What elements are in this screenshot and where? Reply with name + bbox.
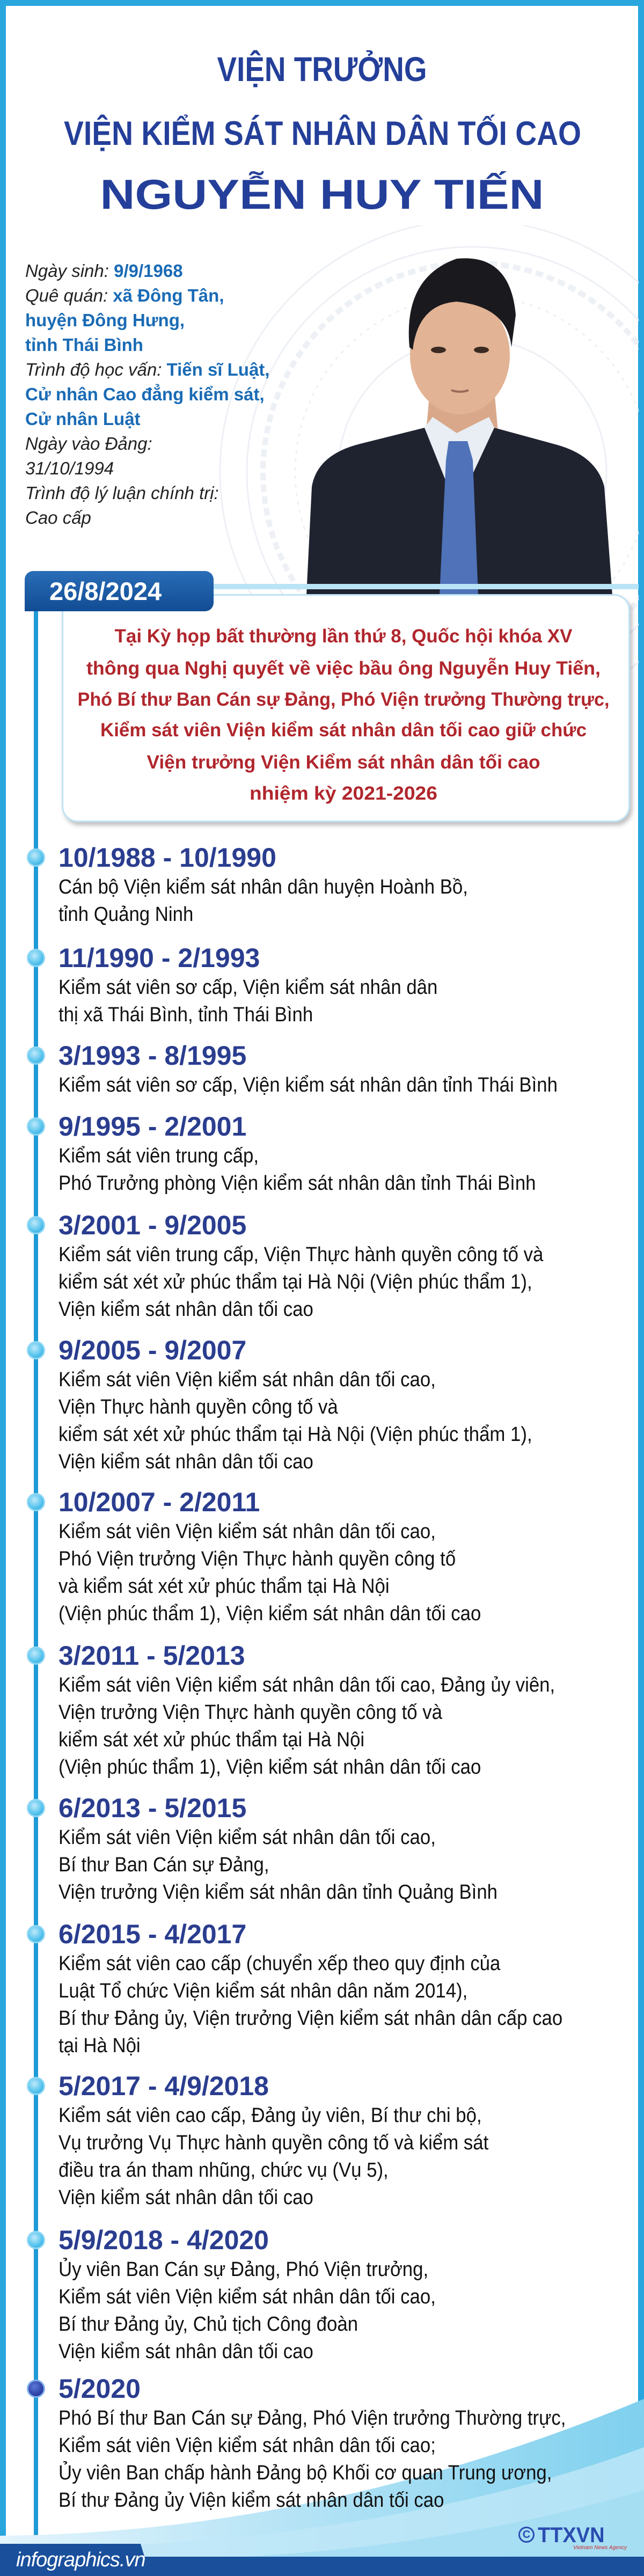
title: NGUYỄN HUY TIẾN	[100, 171, 544, 218]
timeline: 9/1995 - 2/2001	[27, 1111, 536, 1195]
timeline: 3/2011 - 5/2013	[27, 1641, 555, 1779]
callout: election resolution: Kiểm sát viên Viện kiểm sát nhân dân tối cao giữ chức	[100, 720, 587, 741]
timeline: 10/2007 - 2/2011	[27, 1487, 481, 1625]
timeline: 5/9/2018 - 4/2020: 5/9/2018 - 4/2020	[58, 2225, 269, 2255]
timeline: 5/2020: Bí thư Đảng ủy Viện kiểm sát nhân dân tối cao	[58, 2489, 444, 2512]
timeline: 9/2005 - 9/2007: Viện Thực hành quyền công tố và	[58, 1396, 338, 1418]
timeline: 5/2017 - 4/9/2018	[27, 2071, 488, 2209]
timeline: 9/2005 - 9/2007	[27, 1335, 532, 1473]
timeline: 5/9/2018 - 4/2020: Kiểm sát viên Viện kiểm sát nhân dân tối cao,	[58, 2286, 436, 2308]
timeline: 3/2011 - 5/2013: Kiểm sát viên Viện kiểm sát nhân dân tối cao, Đảng ủy viên,	[58, 1674, 555, 1696]
timeline: 11/1990 - 2/1993: 11/1990 - 2/1993	[58, 943, 260, 973]
footer: infographics.vn: infographics.vn	[16, 2549, 145, 2571]
callout: election resolution: nhiệm kỳ 2021-2026	[250, 783, 437, 804]
personal info: Cao cấp	[25, 508, 91, 528]
timeline: 6/2013 - 5/2015: 6/2013 - 5/2015	[58, 1793, 246, 1823]
timeline: 10/2007 - 2/2011: 10/2007 - 2/2011	[58, 1487, 260, 1517]
timeline: 6/2015 - 4/2017: Kiểm sát viên cao cấp (chuyển xếp theo quy định của	[58, 1952, 500, 1975]
timeline: 3/2011 - 5/2013: (Viện phúc thẩm 1), Viện kiểm sát nhân dân tối cao	[58, 1756, 481, 1779]
personal info: tỉnh Thái Bình	[25, 335, 143, 355]
personal info: Quê quán: xã Đông Tân,	[25, 286, 224, 305]
callout: election resolution	[62, 594, 630, 822]
timeline: 5/2017 - 4/9/2018: Vụ trưởng Vụ Thực hành quyền công tố và kiểm sát	[58, 2132, 488, 2154]
logo: TTXVN	[518, 2523, 627, 2551]
timeline: 3/1993 - 8/1995: 3/1993 - 8/1995	[58, 1041, 246, 1071]
timeline: 10/2007 - 2/2011: và kiểm sát xét xử phúc thẩm tại Hà Nội	[58, 1575, 390, 1598]
timeline: 9/2005 - 9/2007: kiểm sát xét xử phúc thẩm tại Hà Nội (Viện phúc thẩm 1),	[58, 1423, 532, 1446]
timeline: 5/2017 - 4/9/2018: 5/2017 - 4/9/2018	[58, 2071, 269, 2101]
timeline: 5/9/2018 - 4/2020	[27, 2225, 436, 2363]
callout: election resolution: Phó Bí thư Ban Cán sự Đảng, Phó Viện trưởng Thường trực,	[77, 689, 610, 710]
date badge: 26/8/2024	[49, 577, 162, 605]
timeline: 3/2001 - 9/2005: kiểm sát xét xử phúc thẩm tại Hà Nội (Viện phúc thẩm 1),	[58, 1271, 532, 1293]
timeline: 6/2015 - 4/2017: Luật Tổ chức Viện kiểm sát nhân dân năm 2014),	[58, 1980, 467, 2002]
footer bar	[0, 2557, 644, 2576]
timeline: 10/2007 - 2/2011: Phó Viện trưởng Viện Thực hành quyền công tố	[58, 1548, 456, 1570]
personal info: Ngày sinh: 9/9/1968	[25, 261, 183, 281]
callout: election resolution: Viện trưởng Viện Kiểm sát nhân dân tối cao	[147, 752, 540, 773]
timeline: 9/2005 - 9/2007: 9/2005 - 9/2007	[58, 1335, 246, 1365]
timeline: 3/1993 - 8/1995	[27, 1041, 558, 1096]
timeline: 9/2005 - 9/2007: Kiểm sát viên Viện kiểm sát nhân dân tối cao,	[58, 1368, 436, 1391]
timeline: 5/9/2018 - 4/2020: Viện kiểm sát nhân dân tối cao	[58, 2340, 313, 2363]
timeline: 6/2013 - 5/2015: Kiểm sát viên Viện kiểm sát nhân dân tối cao,	[58, 1826, 436, 1849]
timeline: 5/2020: Phó Bí thư Ban Cán sự Đảng, Phó Viện trưởng Thường trực,	[58, 2407, 566, 2429]
timeline: 11/1990 - 2/1993: Kiểm sát viên sơ cấp, Viện kiểm sát nhân dân	[58, 976, 437, 999]
timeline: 3/2001 - 9/2005: Viện kiểm sát nhân dân tối cao	[58, 1298, 313, 1321]
timeline: 5/2017 - 4/9/2018: Kiểm sát viên cao cấp, Đảng ủy viên, Bí thư chi bộ,	[58, 2104, 482, 2127]
title: VIỆN KIỂM SÁT NHÂN DÂN TỐI CAO	[64, 114, 581, 152]
timeline: 6/2013 - 5/2015: Bí thư Ban Cán sự Đảng,	[58, 1854, 269, 1876]
timeline: 6/2015 - 4/2017: 6/2015 - 4/2017	[58, 1919, 246, 1949]
timeline: 5/2020: 5/2020	[58, 2374, 141, 2404]
date badge	[25, 571, 214, 611]
timeline: 10/1988 - 10/1990: Cán bộ Viện kiểm sát nhân dân huyện Hoành Bồ,	[58, 876, 468, 898]
timeline: 9/1995 - 2/2001: Kiểm sát viên trung cấp,	[58, 1145, 259, 1167]
logo: TTXVN: Vietnam News Agency	[573, 2545, 627, 2551]
bottom wave	[0, 2399, 644, 2557]
timeline: 11/1990 - 2/1993	[27, 943, 437, 1026]
timeline: 10/1988 - 10/1990: 10/1988 - 10/1990	[58, 843, 276, 873]
timeline: 5/2017 - 4/9/2018: Viện kiểm sát nhân dân tối cao	[58, 2186, 313, 2209]
title	[64, 49, 581, 218]
timeline: 5/2020: Kiểm sát viên Viện kiểm sát nhân dân tối cao;	[58, 2434, 436, 2457]
personal info: Cử nhân Luật	[25, 409, 141, 429]
timeline: 6/2015 - 4/2017: Bí thư Đảng ủy, Viện trưởng Viện kiểm sát nhân dân cấp cao	[58, 2007, 562, 2030]
timeline: 10/2007 - 2/2011: Kiểm sát viên Viện kiểm sát nhân dân tối cao,	[58, 1520, 436, 1543]
timeline: 10/1988 - 10/1990: tỉnh Quảng Ninh	[58, 903, 193, 926]
title: VIỆN TRƯỞNG	[217, 49, 427, 89]
timeline: 9/1995 - 2/2001: Phó Trưởng phòng Viện kiểm sát nhân dân tỉnh Thái Bình	[58, 1172, 536, 1195]
callout: election resolution: thông qua Nghị quyết về việc bầu ông Nguyễn Huy Tiến,	[86, 657, 601, 679]
timeline: 5/2017 - 4/9/2018: điều tra án tham nhũng, chức vụ (Vụ 5),	[58, 2159, 389, 2182]
personal info: huyện Đông Hưng,	[25, 310, 185, 330]
personal info: Trình độ học vấn: Tiến sĩ Luật,	[25, 360, 269, 379]
personal info	[25, 261, 269, 528]
portrait photo	[306, 258, 612, 594]
timeline: 9/2005 - 9/2007: Viện kiểm sát nhân dân tối cao	[58, 1451, 313, 1473]
logo: TTXVN: C	[523, 2529, 530, 2541]
personal info: 31/10/1994	[25, 458, 114, 478]
timeline: 10/1988 - 10/1990	[27, 843, 468, 926]
timeline: 3/2011 - 5/2013: 3/2011 - 5/2013	[58, 1641, 245, 1671]
timeline: 6/2013 - 5/2015: Viện trưởng Viện kiểm sát nhân dân tỉnh Quảng Bình	[58, 1881, 497, 1904]
timeline: 6/2015 - 4/2017: tại Hà Nội	[58, 2035, 141, 2057]
background drum pattern	[219, 225, 639, 670]
callout: election resolution: Tại Kỳ họp bất thường lần thứ 8, Quốc hội khóa XV	[115, 626, 573, 647]
timeline: 3/2001 - 9/2005	[27, 1210, 543, 1321]
personal info: Ngày vào Đảng:	[25, 434, 152, 453]
timeline: 9/1995 - 2/2001: 9/1995 - 2/2001	[58, 1111, 246, 1141]
timeline: 5/2020	[27, 2374, 566, 2512]
timeline vertical line	[34, 590, 38, 2555]
personal info: Cử nhân Cao đẳng kiểm sát,	[25, 384, 265, 404]
timeline: 11/1990 - 2/1993: thị xã Thái Bình, tỉnh Thái Bình	[58, 1004, 313, 1026]
timeline: 3/2001 - 9/2005: 3/2001 - 9/2005	[58, 1210, 246, 1240]
timeline: 6/2015 - 4/2017	[27, 1919, 562, 2057]
logo: TTXVN: TTXVN	[538, 2523, 605, 2547]
timeline: 5/2020: Ủy viên Ban chấp hành Đảng bộ Khối cơ quan Trung ương,	[58, 2462, 552, 2484]
timeline: 6/2013 - 5/2015	[27, 1793, 497, 1904]
timeline: 10/2007 - 2/2011: (Viện phúc thẩm 1), Viện kiểm sát nhân dân tối cao	[58, 1602, 481, 1625]
timeline: 3/2011 - 5/2013: Viện trưởng Viện Thực hành quyền công tố và	[58, 1701, 442, 1724]
timeline: 3/2001 - 9/2005: Kiểm sát viên trung cấp, Viện Thực hành quyền công tố và	[58, 1243, 543, 1266]
connector bar	[156, 584, 639, 589]
timeline: 5/9/2018 - 4/2020: Bí thư Đảng ủy, Chủ tịch Công đoàn	[58, 2313, 358, 2336]
timeline: 5/9/2018 - 4/2020: Ủy viên Ban Cán sự Đảng, Phó Viện trưởng,	[58, 2258, 428, 2281]
timeline: 3/2011 - 5/2013: kiểm sát xét xử phúc thẩm tại Hà Nội	[58, 1729, 364, 1751]
timeline: 3/1993 - 8/1995: Kiểm sát viên sơ cấp, Viện kiểm sát nhân dân tỉnh Thái Bình	[58, 1074, 558, 1096]
personal info: Trình độ lý luận chính trị:	[25, 483, 219, 503]
